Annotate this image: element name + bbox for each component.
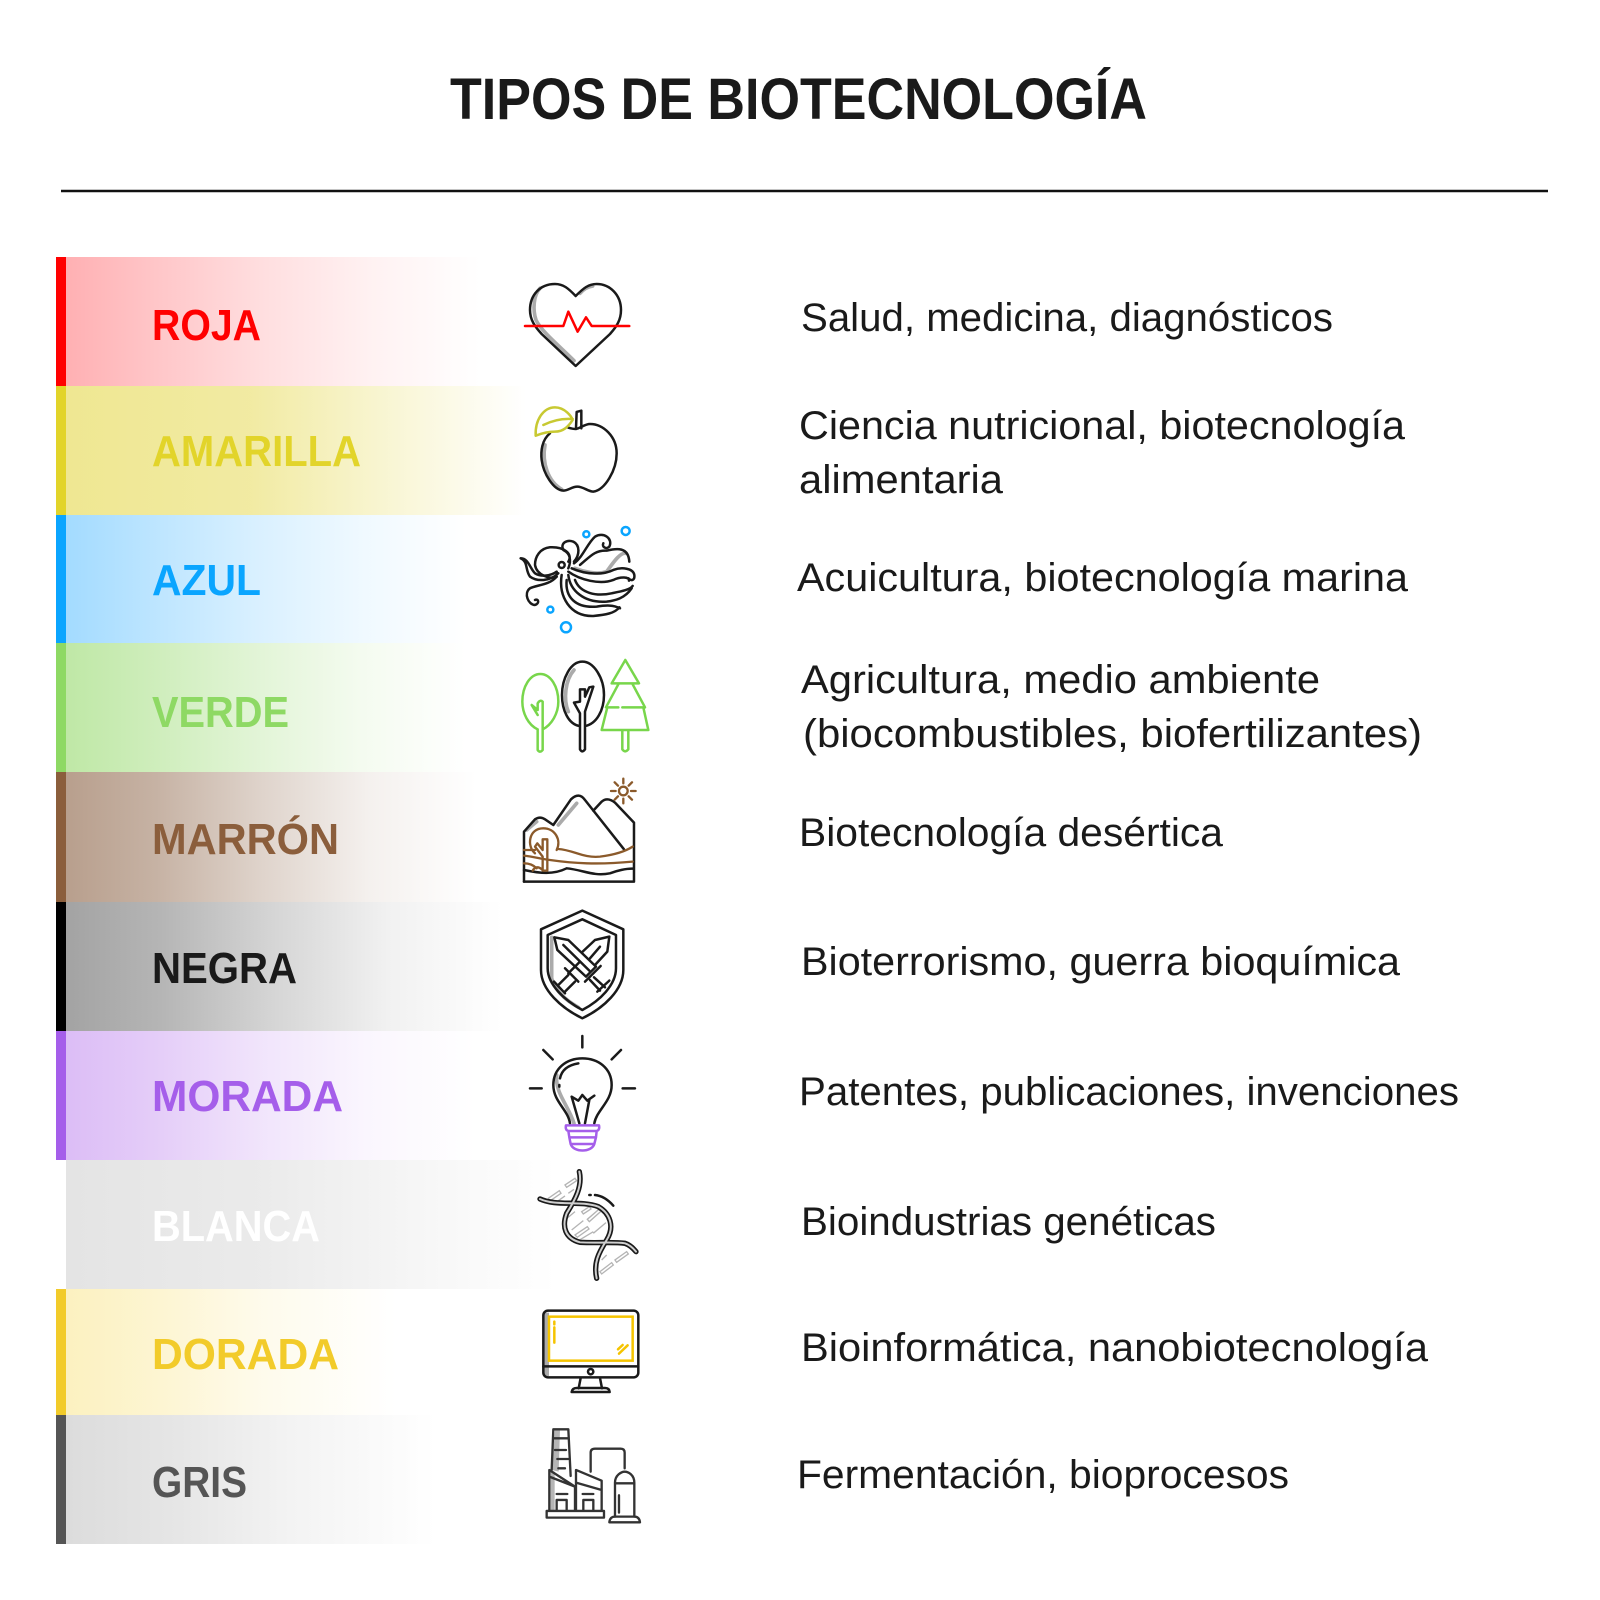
row: verde [56, 643, 1422, 772]
label: blanca: BLANCA [152, 1202, 320, 1251]
label: verde: VERDE [152, 688, 289, 737]
row: blanca [66, 1160, 1216, 1289]
row: negra [56, 902, 1401, 1031]
title: TIPOS DE BIOTECNOLOGÍA [450, 67, 1147, 132]
row: dorada [56, 1289, 1429, 1415]
label: azul: AZUL [152, 556, 261, 605]
colour band: negra [56, 902, 502, 1031]
colour band: gris [56, 1415, 436, 1544]
icon: computer monitor [543, 1311, 638, 1392]
icon: octopus [521, 527, 634, 632]
icon: shield with swords [541, 911, 623, 1018]
row: marrón [56, 772, 1224, 902]
description: negra: Bioterrorismo, guerra bioquímica [801, 940, 1401, 984]
icon: dna helix [540, 1172, 636, 1278]
description: roja: Salud, medicina, diagnósticos [801, 296, 1333, 340]
colour band: morada [56, 1031, 476, 1160]
description: verde: Agricultura, medio ambiente [801, 658, 1320, 702]
description: morada: Patentes, publicaciones, invenciones [799, 1070, 1459, 1114]
colour band: blanca [66, 1160, 556, 1289]
label: gris: GRIS [152, 1458, 247, 1507]
label: roja: ROJA [152, 301, 261, 350]
colour band: azul [56, 515, 466, 643]
icon: factory [547, 1429, 640, 1522]
label: marrón: MARRÓN [152, 814, 339, 864]
description: amarilla: Ciencia nutricional, biotecnología [799, 404, 1406, 448]
description: marrón: Biotecnología desértica [799, 811, 1224, 855]
label: negra: NEGRA [152, 944, 297, 993]
icon: desert mountains [524, 779, 636, 882]
description: azul: Acuicultura, biotecnología marina [797, 556, 1409, 600]
colour band: roja [56, 257, 480, 386]
row: amarilla [56, 386, 1406, 515]
description: amarilla: alimentaria [799, 458, 1004, 502]
label: dorada: DORADA [152, 1330, 339, 1379]
label: amarilla: AMARILLA [152, 427, 361, 476]
colour band: verde [56, 643, 466, 772]
colour band: dorada [56, 1289, 396, 1415]
description: gris: Fermentación, bioprocesos [797, 1453, 1289, 1497]
label: morada: MORADA [152, 1072, 343, 1121]
description: dorada: Bioinformática, nanobiotecnología [801, 1326, 1429, 1370]
icon: apple [536, 407, 617, 492]
description: blanca: Bioindustrias genéticas [801, 1200, 1216, 1244]
icon: heart with pulse [525, 284, 629, 366]
row: azul [56, 515, 1409, 643]
row: roja [56, 257, 1333, 386]
row: gris [56, 1415, 1289, 1544]
description: verde: (biocombustibles, biofertilizantes) [803, 712, 1422, 756]
colour band: marrón [56, 772, 476, 902]
icon: trees [522, 660, 648, 752]
row: morada [56, 1031, 1459, 1160]
colour band: amarilla [56, 386, 526, 515]
icon: light bulb [530, 1036, 635, 1150]
